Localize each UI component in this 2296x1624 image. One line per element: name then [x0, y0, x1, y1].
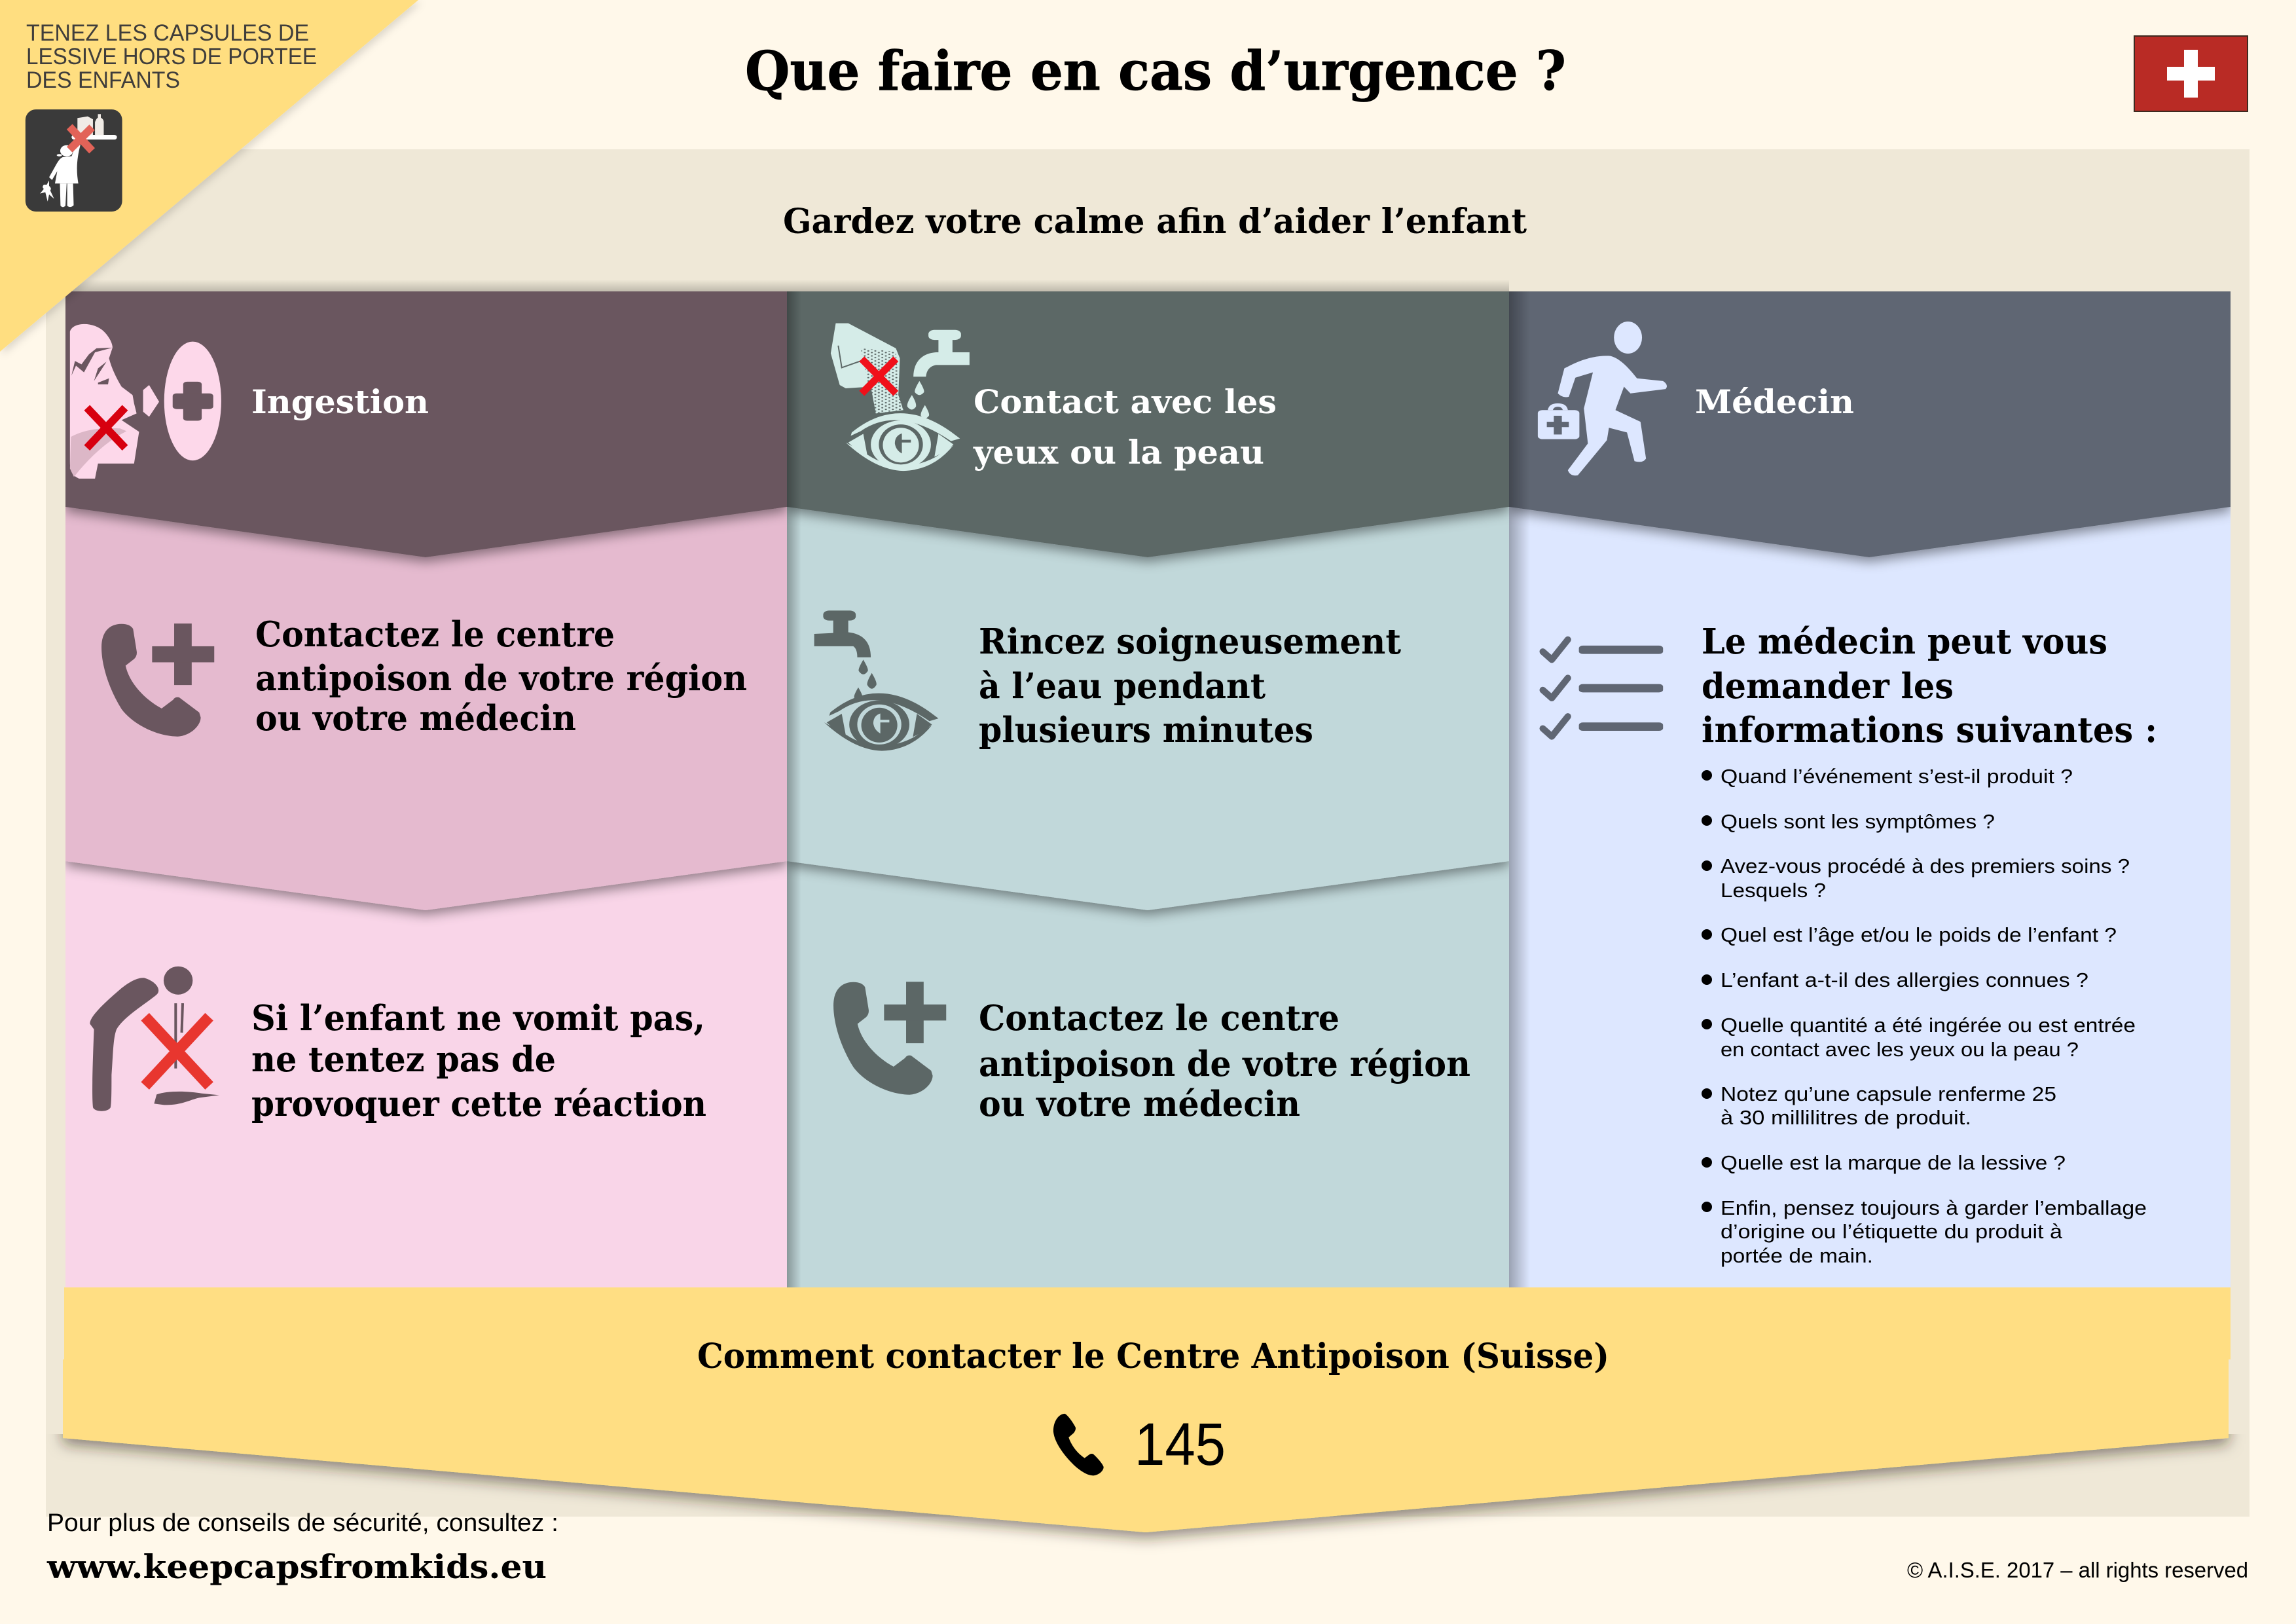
text: doctor may ask: Le médecin peut vous: [1702, 621, 2107, 662]
column shadow on top edge: [65, 280, 1509, 291]
icon: checklist: [1543, 640, 1663, 737]
keep out of reach text: [26, 20, 317, 93]
text: do not induce vomiting: ne tentez pas de: [251, 1039, 556, 1080]
text: rinse with water: à l’eau pendant: [979, 666, 1266, 707]
list: questions the doctor may ask: Notez qu’une capsule renferme 25: [1721, 1082, 2056, 1105]
text: more safety advice: Pour plus de conseils de sécurité, consultez :: [47, 1509, 558, 1537]
website link: www.keepcapsfromkids.eu: [46, 1547, 547, 1586]
text: contact poison centre (contact): ou votre médecin: [979, 1084, 1300, 1124]
text: rinse with water: Rincez soigneusement: [979, 621, 1402, 662]
icon: Swiss flag: [2134, 36, 2248, 111]
text: contact poison centre (ingestion): Contactez le centre: [255, 614, 615, 655]
panel: contact column: [787, 291, 1509, 1287]
text: doctor may ask: [1702, 621, 2157, 750]
heading: contact with eyes or skin: [973, 382, 1277, 471]
panel: ingestion column: [65, 291, 787, 1287]
text: contact poison centre (contact): [979, 998, 1470, 1124]
icon: face with forbidden mouth and medical cross: [70, 324, 221, 479]
copyright: © A.I.S.E. 2017 – all rights reserved: [1907, 1558, 2248, 1582]
yellow corner banner: [0, 0, 418, 352]
phone number: 145: [1135, 1411, 1226, 1478]
list: questions the doctor may ask: Quels sont les symptômes ?: [1721, 810, 1995, 833]
text: contact poison centre (ingestion): ou votre médecin: [255, 698, 576, 739]
keep out of reach text: DES ENFANTS: [26, 67, 180, 93]
list: questions the doctor may ask: Quel est l’âge et/ou le poids de l’enfant ?: [1721, 923, 2117, 946]
list: questions the doctor may ask: L’enfant a-t-il des allergies connues ?: [1721, 969, 2088, 991]
icon: child reaching for shelf: [26, 109, 122, 212]
list: questions the doctor may ask: Quand l’événement s’est-il produit ?: [1721, 765, 2073, 788]
subtitle: Gardez votre calme afin d’aider l’enfant: [783, 202, 1527, 242]
heading: contact with eyes or skin: Contact avec les: [974, 382, 1277, 421]
icon: do not induce vomiting: [90, 967, 219, 1111]
list: questions the doctor may ask: portée de main.: [1721, 1244, 1873, 1267]
heading: how to contact: Comment contacter le Centre Antipoison (Suisse): [697, 1337, 1609, 1376]
text: doctor may ask: demander les: [1702, 666, 1954, 707]
icon: faucet rinsing eye: [814, 610, 938, 751]
text: contact poison centre (contact): Contactez le centre: [979, 998, 1339, 1039]
text: contact poison centre (ingestion): antipoison de votre région: [255, 658, 747, 699]
heading: contact with eyes or skin: yeux ou la peau: [973, 433, 1264, 471]
text: do not induce vomiting: provoquer cette réaction: [251, 1084, 706, 1124]
text: doctor may ask: informations suivantes :: [1702, 710, 2157, 750]
keep out of reach text: TENEZ LES CAPSULES DE: [26, 20, 309, 46]
icon: phone with plus (contact): [833, 982, 946, 1095]
icon: telephone: [1053, 1414, 1104, 1475]
list: questions the doctor may ask: Quelle quantité a été ingérée ou est entrée: [1721, 1014, 2136, 1037]
list: questions the doctor may ask: Enfin, pensez toujours à garder l’emballage: [1721, 1196, 2147, 1219]
keep out of reach text: LESSIVE HORS DE PORTEE: [26, 44, 317, 69]
icon: capsule, faucet and eye: [831, 323, 970, 471]
list: questions the doctor may ask: en contact avec les yeux ou la peau ?: [1721, 1038, 2079, 1061]
list: questions the doctor may ask: d’origine ou l’étiquette du produit à: [1721, 1220, 2063, 1243]
list: questions the doctor may ask: Lesquels ?: [1721, 879, 1826, 902]
list: questions the doctor may ask: à 30 millilitres de produit.: [1721, 1106, 1971, 1129]
title: Que faire en cas d’urgence ?: [745, 40, 1566, 103]
heading: doctor: Médecin: [1695, 382, 1854, 421]
list: questions the doctor may ask: [1702, 765, 2147, 1267]
list: questions the doctor may ask: Avez-vous procédé à des premiers soins ?: [1721, 855, 2130, 877]
text: rinse with water: plusieurs minutes: [979, 710, 1313, 750]
icon: phone with plus (ingestion): [101, 623, 214, 737]
text: contact poison centre (ingestion): [255, 614, 747, 739]
panel: doctor column: [1509, 291, 2231, 1287]
text: do not induce vomiting: Si l’enfant ne vomit pas,: [251, 998, 705, 1039]
text: contact poison centre (contact): antipoison de votre région: [979, 1044, 1470, 1084]
heading: ingestion: Ingestion: [251, 382, 429, 421]
text: do not induce vomiting: [251, 998, 706, 1124]
panel: contact banner: [63, 1287, 2231, 1532]
text: rinse with water: [979, 621, 1402, 750]
icon: running doctor with bag: [1538, 322, 1667, 475]
list: questions the doctor may ask: Quelle est la marque de la lessive ?: [1721, 1151, 2066, 1174]
